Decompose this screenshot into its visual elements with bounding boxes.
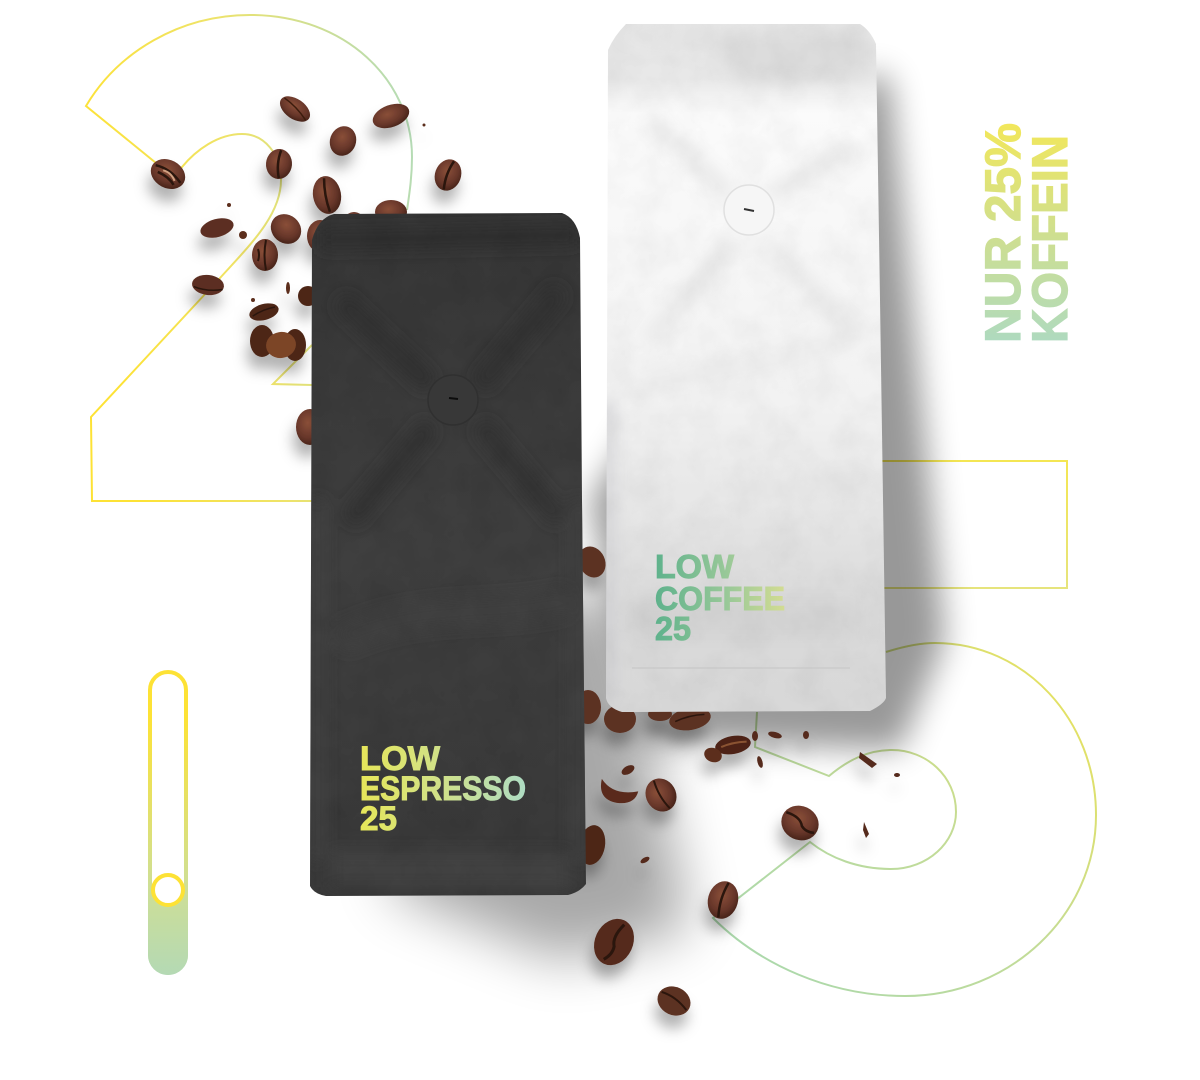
bean — [587, 912, 641, 972]
infographic canvas — [84, 14, 1097, 1036]
white coffee bag — [600, 20, 890, 720]
bean — [298, 286, 318, 306]
bean — [344, 212, 364, 232]
bag label: LOW ESPRESSO 25 — [360, 740, 526, 838]
bean — [264, 330, 298, 360]
bean — [598, 779, 639, 806]
bean — [284, 329, 306, 361]
numeral outline: 2 — [86, 15, 412, 501]
crumb — [859, 752, 877, 768]
crumb — [803, 731, 809, 739]
shadow: black bag — [390, 600, 690, 960]
bag label: LOW COFFEE 25: 25 — [655, 610, 691, 647]
bean — [146, 153, 190, 195]
bean — [653, 981, 695, 1021]
crumb — [894, 773, 900, 777]
shadow: white bag — [590, 70, 945, 750]
bag valve — [428, 375, 478, 425]
bag label: LOW COFFEE 25 — [655, 548, 785, 647]
bean — [776, 800, 824, 846]
crumb — [251, 298, 255, 302]
crumb — [639, 855, 651, 865]
crumb — [239, 231, 247, 239]
numeral outline: 3 — [713, 643, 1096, 996]
crumb — [227, 203, 231, 207]
bean — [307, 220, 333, 252]
bean — [369, 99, 413, 133]
coffee beans: upper left cluster — [146, 91, 466, 445]
bean — [714, 733, 752, 757]
side heading: NUR 25% KOFFEIN: NUR 25% — [975, 123, 1031, 343]
bean — [648, 707, 672, 721]
bag label: LOW COFFEE 25: LOW — [655, 548, 735, 585]
side heading: NUR 25% KOFFEIN — [975, 123, 1078, 343]
bean — [310, 174, 344, 216]
bean — [296, 409, 324, 445]
bean — [250, 325, 274, 357]
crumb — [767, 730, 783, 740]
bean — [604, 705, 636, 733]
bean — [573, 542, 611, 582]
black espresso bag — [300, 205, 595, 905]
bean — [430, 156, 466, 194]
gauge marker — [153, 875, 183, 905]
bean — [667, 705, 713, 733]
bean — [275, 91, 315, 127]
bean — [640, 773, 682, 817]
bag label: LOW ESPRESSO 25: LOW — [360, 740, 441, 778]
crumb — [752, 731, 758, 741]
bean — [326, 122, 360, 160]
bean — [198, 215, 236, 241]
bean — [265, 208, 307, 250]
bean — [575, 690, 601, 724]
crumb — [863, 822, 869, 838]
crumb — [286, 282, 290, 294]
bag valve — [724, 185, 774, 235]
gauge fill — [148, 890, 188, 975]
bag label: LOW ESPRESSO 25: 25 — [360, 800, 397, 838]
bag label: LOW ESPRESSO 25: ESPRESSO — [360, 770, 526, 808]
bean — [265, 148, 293, 180]
bag label: LOW COFFEE 25: COFFEE — [655, 580, 785, 617]
bag folds — [606, 36, 862, 582]
caffeine gauge — [148, 672, 188, 975]
gauge tube — [150, 672, 186, 973]
bean — [247, 300, 281, 324]
bean — [576, 823, 608, 867]
crumb — [756, 756, 764, 768]
coffee beans: lower cluster — [573, 542, 900, 1021]
numeral outline: 5 rectangle fragment — [880, 461, 1067, 588]
bean — [375, 200, 407, 224]
bean — [191, 273, 225, 297]
bag folds — [318, 235, 580, 870]
bean — [702, 745, 724, 765]
crumb — [422, 124, 426, 126]
bean — [252, 239, 278, 271]
side heading: NUR 25% KOFFEIN: KOFFEIN — [1022, 135, 1078, 343]
bean — [704, 878, 742, 922]
crumb — [620, 763, 636, 777]
